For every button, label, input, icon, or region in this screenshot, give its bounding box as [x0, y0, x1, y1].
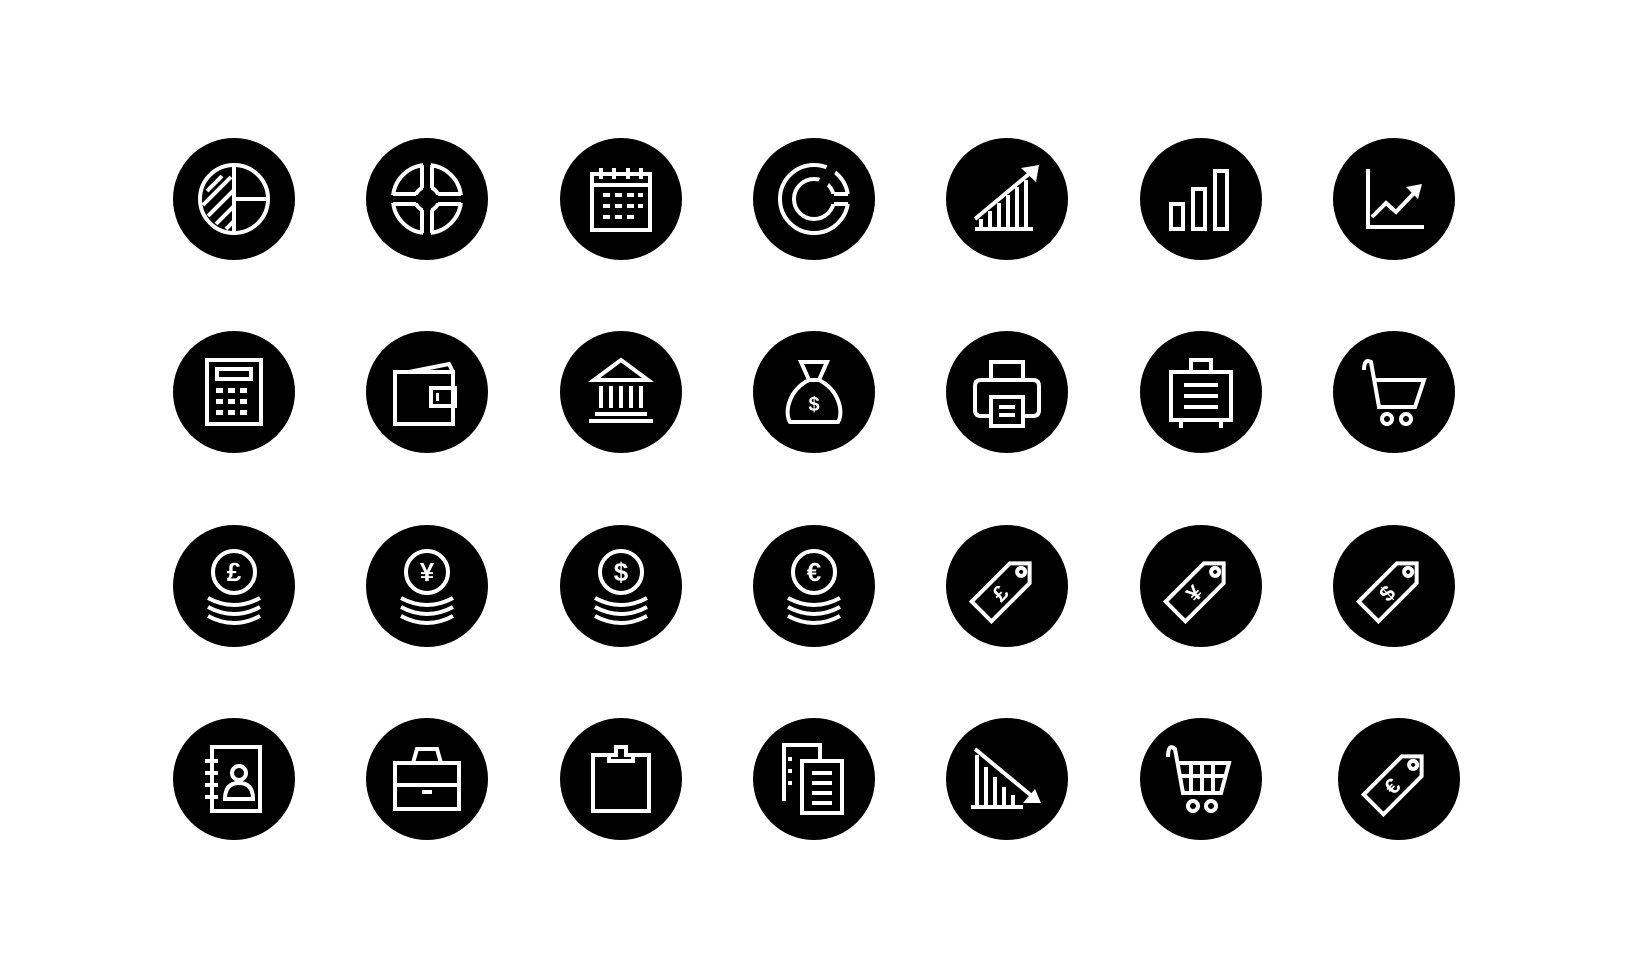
icon: euro coins — [753, 525, 875, 647]
icon: line chart — [1333, 138, 1455, 260]
icon: contact book — [173, 718, 295, 840]
icon: bank — [560, 331, 682, 453]
icon: dollar tag — [1308, 500, 1480, 672]
icon: pound coins — [173, 525, 295, 647]
icon: segmented ring — [366, 138, 488, 260]
icon: yen coins: ¥ — [420, 557, 435, 587]
icon: dollar tag: $ — [1374, 580, 1400, 607]
icon: clipboard — [560, 718, 682, 840]
icon: declining chart — [946, 718, 1068, 840]
icon: money bag — [753, 331, 875, 453]
icon: dollar coins: $ — [614, 557, 629, 587]
icon: calculator — [173, 331, 295, 453]
icon: pound coins: £ — [227, 557, 242, 587]
icon: yen tag — [1115, 500, 1287, 672]
icon: euro coins: € — [807, 557, 821, 587]
icon: yen tag: ¥ — [1181, 580, 1208, 607]
icon: pie chart — [173, 138, 295, 260]
icon: euro tag — [1313, 693, 1485, 865]
icon: euro tag: € — [1379, 773, 1405, 800]
icon: documents — [753, 718, 875, 840]
icon: dollar coins — [560, 525, 682, 647]
icon: suitcase — [1140, 331, 1262, 453]
icon: printer — [946, 331, 1068, 453]
icon: shopping cart — [1333, 331, 1455, 453]
icon: bar chart — [1140, 138, 1262, 260]
icon: calendar — [560, 138, 682, 260]
icon: wallet — [366, 331, 488, 453]
icon: yen coins — [366, 525, 488, 647]
icon: donut chart — [753, 138, 875, 260]
icon: pound tag — [921, 500, 1093, 672]
icon: briefcase — [366, 718, 488, 840]
icon: money bag: $ — [808, 394, 820, 416]
icon: growth chart — [946, 138, 1068, 260]
icon: cart with grid — [1140, 718, 1262, 840]
icon: pound tag: £ — [987, 580, 1014, 607]
